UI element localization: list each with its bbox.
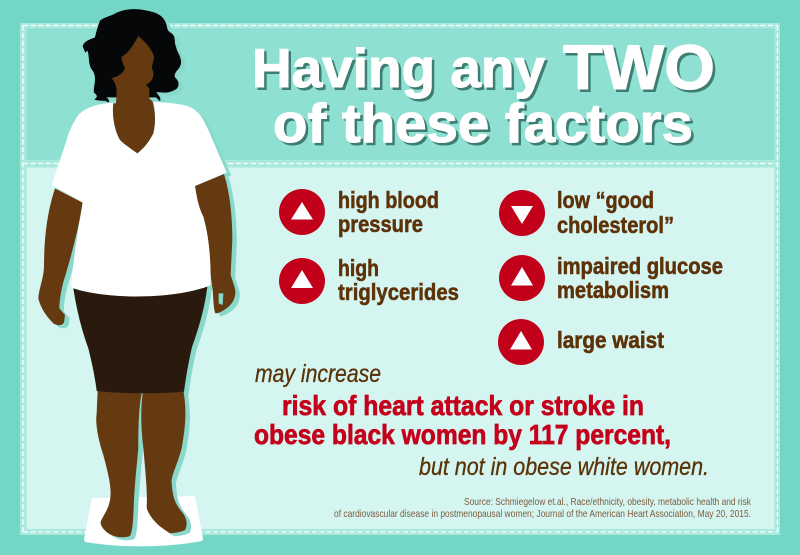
title: TWO	[563, 33, 715, 103]
factor: large waist	[498, 319, 664, 365]
factor: low good cholesterol	[499, 187, 674, 238]
factor: impaired glucose metabolism: impaired glucose	[557, 253, 723, 279]
text: may increase: may increase	[255, 360, 381, 388]
title: TWO	[566, 36, 718, 106]
factor: high triglycerides: high	[338, 255, 379, 281]
factor: high triglycerides: triglycerides	[338, 279, 459, 305]
left arm	[38, 188, 83, 325]
scale	[84, 496, 203, 546]
face and neck	[112, 36, 155, 153]
title: Having any	[254, 40, 548, 102]
panel: factors background	[26, 168, 774, 529]
factor: high blood pressure: high blood	[338, 187, 439, 213]
factor: high blood pressure: pressure	[338, 211, 423, 237]
title: Having any	[252, 37, 545, 99]
text: risk statement: risk of heart attack or stroke in	[282, 390, 644, 421]
title: of these factors	[273, 92, 693, 154]
text: risk statement: obese black women by 117 percent,	[254, 419, 671, 450]
factor: impaired glucose metabolism	[499, 253, 723, 303]
title: of these factors	[276, 94, 696, 156]
panel: heading background	[26, 28, 774, 160]
title	[252, 33, 718, 156]
text: but not in obese white women: but not in obese white women.	[419, 453, 709, 481]
figure shadow	[43, 12, 240, 540]
left leg	[96, 390, 142, 537]
factor: impaired glucose metabolism: metabolism	[557, 277, 669, 303]
factor: low good cholesterol: low “good	[557, 187, 654, 213]
factor: high blood pressure	[279, 187, 439, 237]
hair	[83, 9, 181, 103]
shirt	[52, 102, 227, 296]
skirt	[73, 287, 207, 393]
source citation	[334, 496, 752, 520]
factor: large waist: large waist	[557, 327, 664, 353]
right leg	[141, 390, 187, 533]
factor: high triglycerides	[279, 255, 459, 305]
illustration: woman on scale	[38, 9, 240, 546]
factor: low good cholesterol: cholesterol”	[557, 212, 674, 238]
text: risk statement	[254, 390, 671, 450]
right arm	[195, 174, 235, 313]
